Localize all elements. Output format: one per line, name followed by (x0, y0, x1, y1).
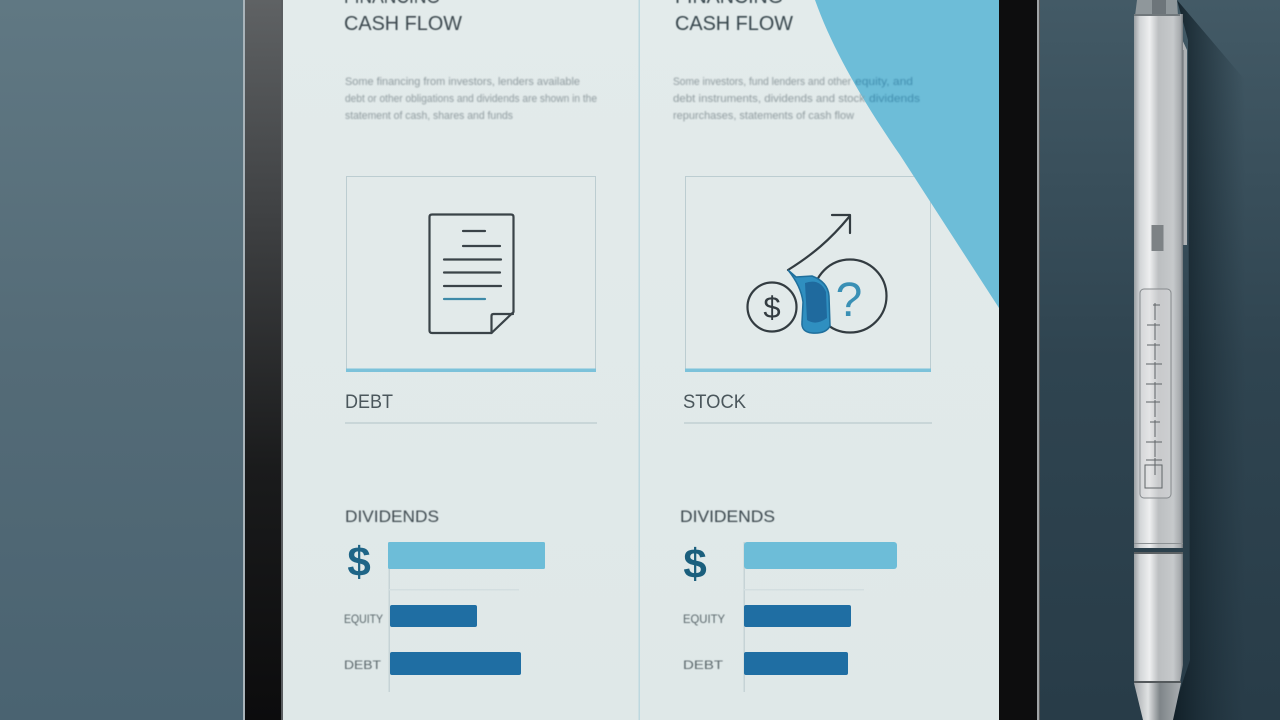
left column description: Some financing from investors, lenders available (345, 76, 580, 88)
column divider (638, 0, 640, 720)
right column heading (675, 0, 793, 35)
question circle (814, 260, 886, 332)
chart heading: DIVIDENDS (345, 507, 439, 526)
pen shadow (1170, 0, 1245, 720)
label: debt: DEBT (345, 392, 393, 413)
panel: stock card (685, 176, 931, 372)
right column description: repurchases, statements of cash flow (673, 110, 854, 122)
blue blob (788, 270, 830, 333)
bar chart: dividends right (680, 507, 897, 692)
right column description (673, 76, 921, 122)
left column description (345, 76, 597, 122)
pen button (1152, 225, 1164, 251)
pen cap top (1135, 0, 1178, 16)
bar: medium: EQUITY (344, 612, 383, 626)
label: stock: STOCK (683, 392, 746, 413)
right column description: debt instruments, dividends and stock (673, 93, 866, 105)
tablet screen (283, 0, 999, 720)
pen tip (1134, 683, 1181, 720)
bar: long: DEBT (683, 658, 724, 672)
left column heading: CASH FLOW (344, 13, 462, 35)
icon: dollar: $ (347, 538, 371, 585)
pen clip (1180, 35, 1187, 245)
pen lower grip (1134, 554, 1183, 682)
icon: coin, question and rising arrow: ? (836, 274, 862, 327)
bar: light (744, 542, 897, 569)
left column heading (344, 0, 462, 35)
pen ring (1134, 543, 1183, 554)
icon: coin, question and rising arrow (748, 215, 886, 333)
pen barrel (1134, 14, 1183, 548)
chart heading: DIVIDENDS (680, 507, 775, 526)
icon: document (430, 214, 514, 333)
right column description: Some investors, fund lenders and other (673, 76, 851, 88)
left column description: debt or other obligations and dividends are shown in the (345, 93, 597, 105)
bar chart: dividends left (344, 507, 545, 692)
background: desk right (1040, 0, 1280, 720)
background: desk left (0, 0, 243, 720)
right column description: equity, and (855, 76, 913, 88)
bar: medium: EQUITY (683, 612, 725, 626)
pen scale label (1140, 289, 1171, 498)
left column description: statement of cash, shares and funds (345, 110, 513, 122)
bar: light (388, 542, 545, 569)
dollar coin (748, 282, 796, 332)
tablet frame (243, 0, 1040, 720)
arrow (788, 215, 850, 270)
panel: debt card (346, 176, 596, 372)
bar: long: DEBT (344, 658, 382, 672)
decorative blue corner shape (815, 0, 999, 308)
right column heading: CASH FLOW (675, 13, 793, 35)
right column description: dividends (869, 93, 921, 105)
icon: coin, question and rising arrow: $ (763, 290, 781, 325)
icon: dollar: $ (683, 540, 707, 587)
pen (1134, 0, 1187, 720)
